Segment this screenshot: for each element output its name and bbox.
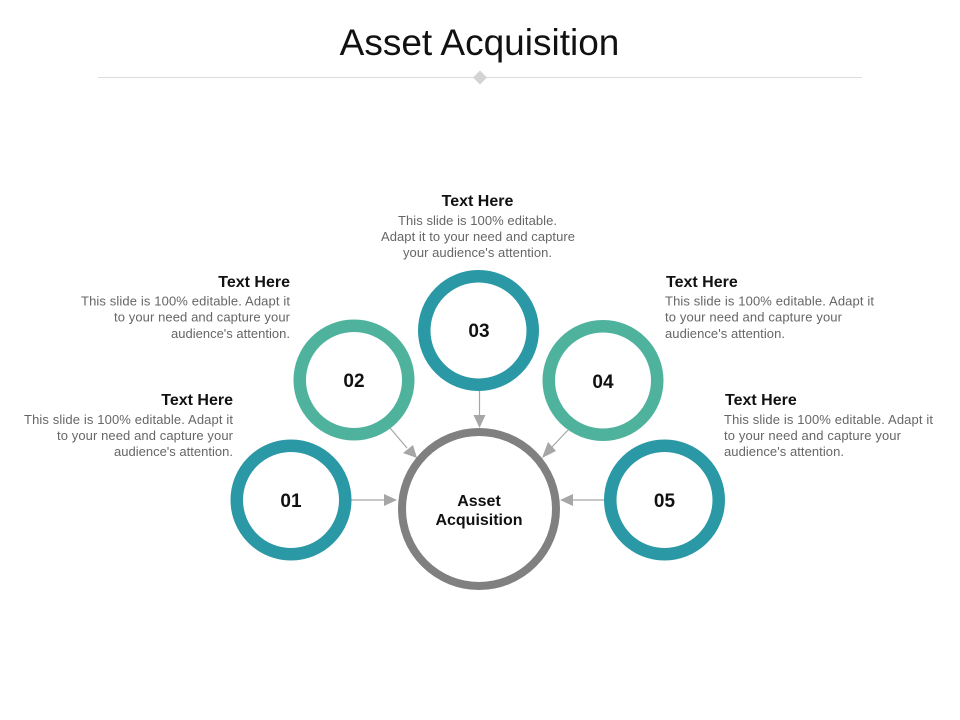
text block 01: Text Here [161, 392, 233, 409]
text block 03: Text Here [442, 193, 513, 210]
text block 05 [724, 392, 933, 459]
arrow: 04 to center [542, 430, 568, 458]
node 04 [549, 326, 657, 435]
node 02 [300, 326, 408, 434]
arrow: 02 to center [390, 428, 417, 458]
text block 05: Text Here [725, 392, 797, 409]
text block 03 [381, 193, 575, 260]
title divider with diamond [98, 70, 862, 84]
text block 05: to your need and capture your [724, 428, 902, 443]
text block 01: audience's attention. [114, 444, 233, 459]
arrow: 05 to center [560, 494, 605, 506]
text block 04: to your need and capture your [665, 310, 843, 324]
node 03: 03 [468, 321, 490, 342]
node 01 [237, 446, 345, 554]
text block 05: This slide is 100% editable. Adapt it [724, 412, 933, 427]
central circle: Acquisition [435, 512, 523, 529]
node 04: 04 [592, 372, 614, 393]
node 03 [424, 276, 533, 385]
arrow: 01 to center [351, 494, 397, 506]
text block 02: to your need and capture your [114, 310, 291, 324]
arrow: 03 to center [474, 390, 486, 428]
text block 04: Text Here [666, 274, 738, 291]
text block 01: This slide is 100% editable. Adapt it [24, 412, 233, 427]
text block 03: This slide is 100% editable. [398, 213, 557, 228]
node 05: 05 [654, 491, 675, 512]
text block 04 [665, 274, 874, 341]
text block 03: your audience's attention. [403, 245, 552, 260]
text block 01 [24, 392, 234, 459]
text block 02: audience's attention. [171, 326, 290, 341]
text block 05: audience's attention. [724, 444, 844, 459]
central circle: Asset [457, 493, 501, 510]
text block 04: This slide is 100% editable. Adapt it [665, 294, 874, 308]
central circle [402, 432, 556, 586]
text block 02 [81, 274, 291, 341]
text block 04: audience's attention. [665, 326, 785, 341]
title: Asset Acquisition [340, 22, 619, 63]
node 05 [610, 446, 719, 554]
node 02: 02 [343, 371, 365, 392]
node 01: 01 [280, 491, 302, 512]
text block 02: This slide is 100% editable. Adapt it [81, 294, 290, 308]
text block 02: Text Here [218, 274, 290, 291]
text block 03: Adapt it to your need and capture [381, 229, 575, 244]
text block 01: to your need and capture your [57, 428, 234, 443]
